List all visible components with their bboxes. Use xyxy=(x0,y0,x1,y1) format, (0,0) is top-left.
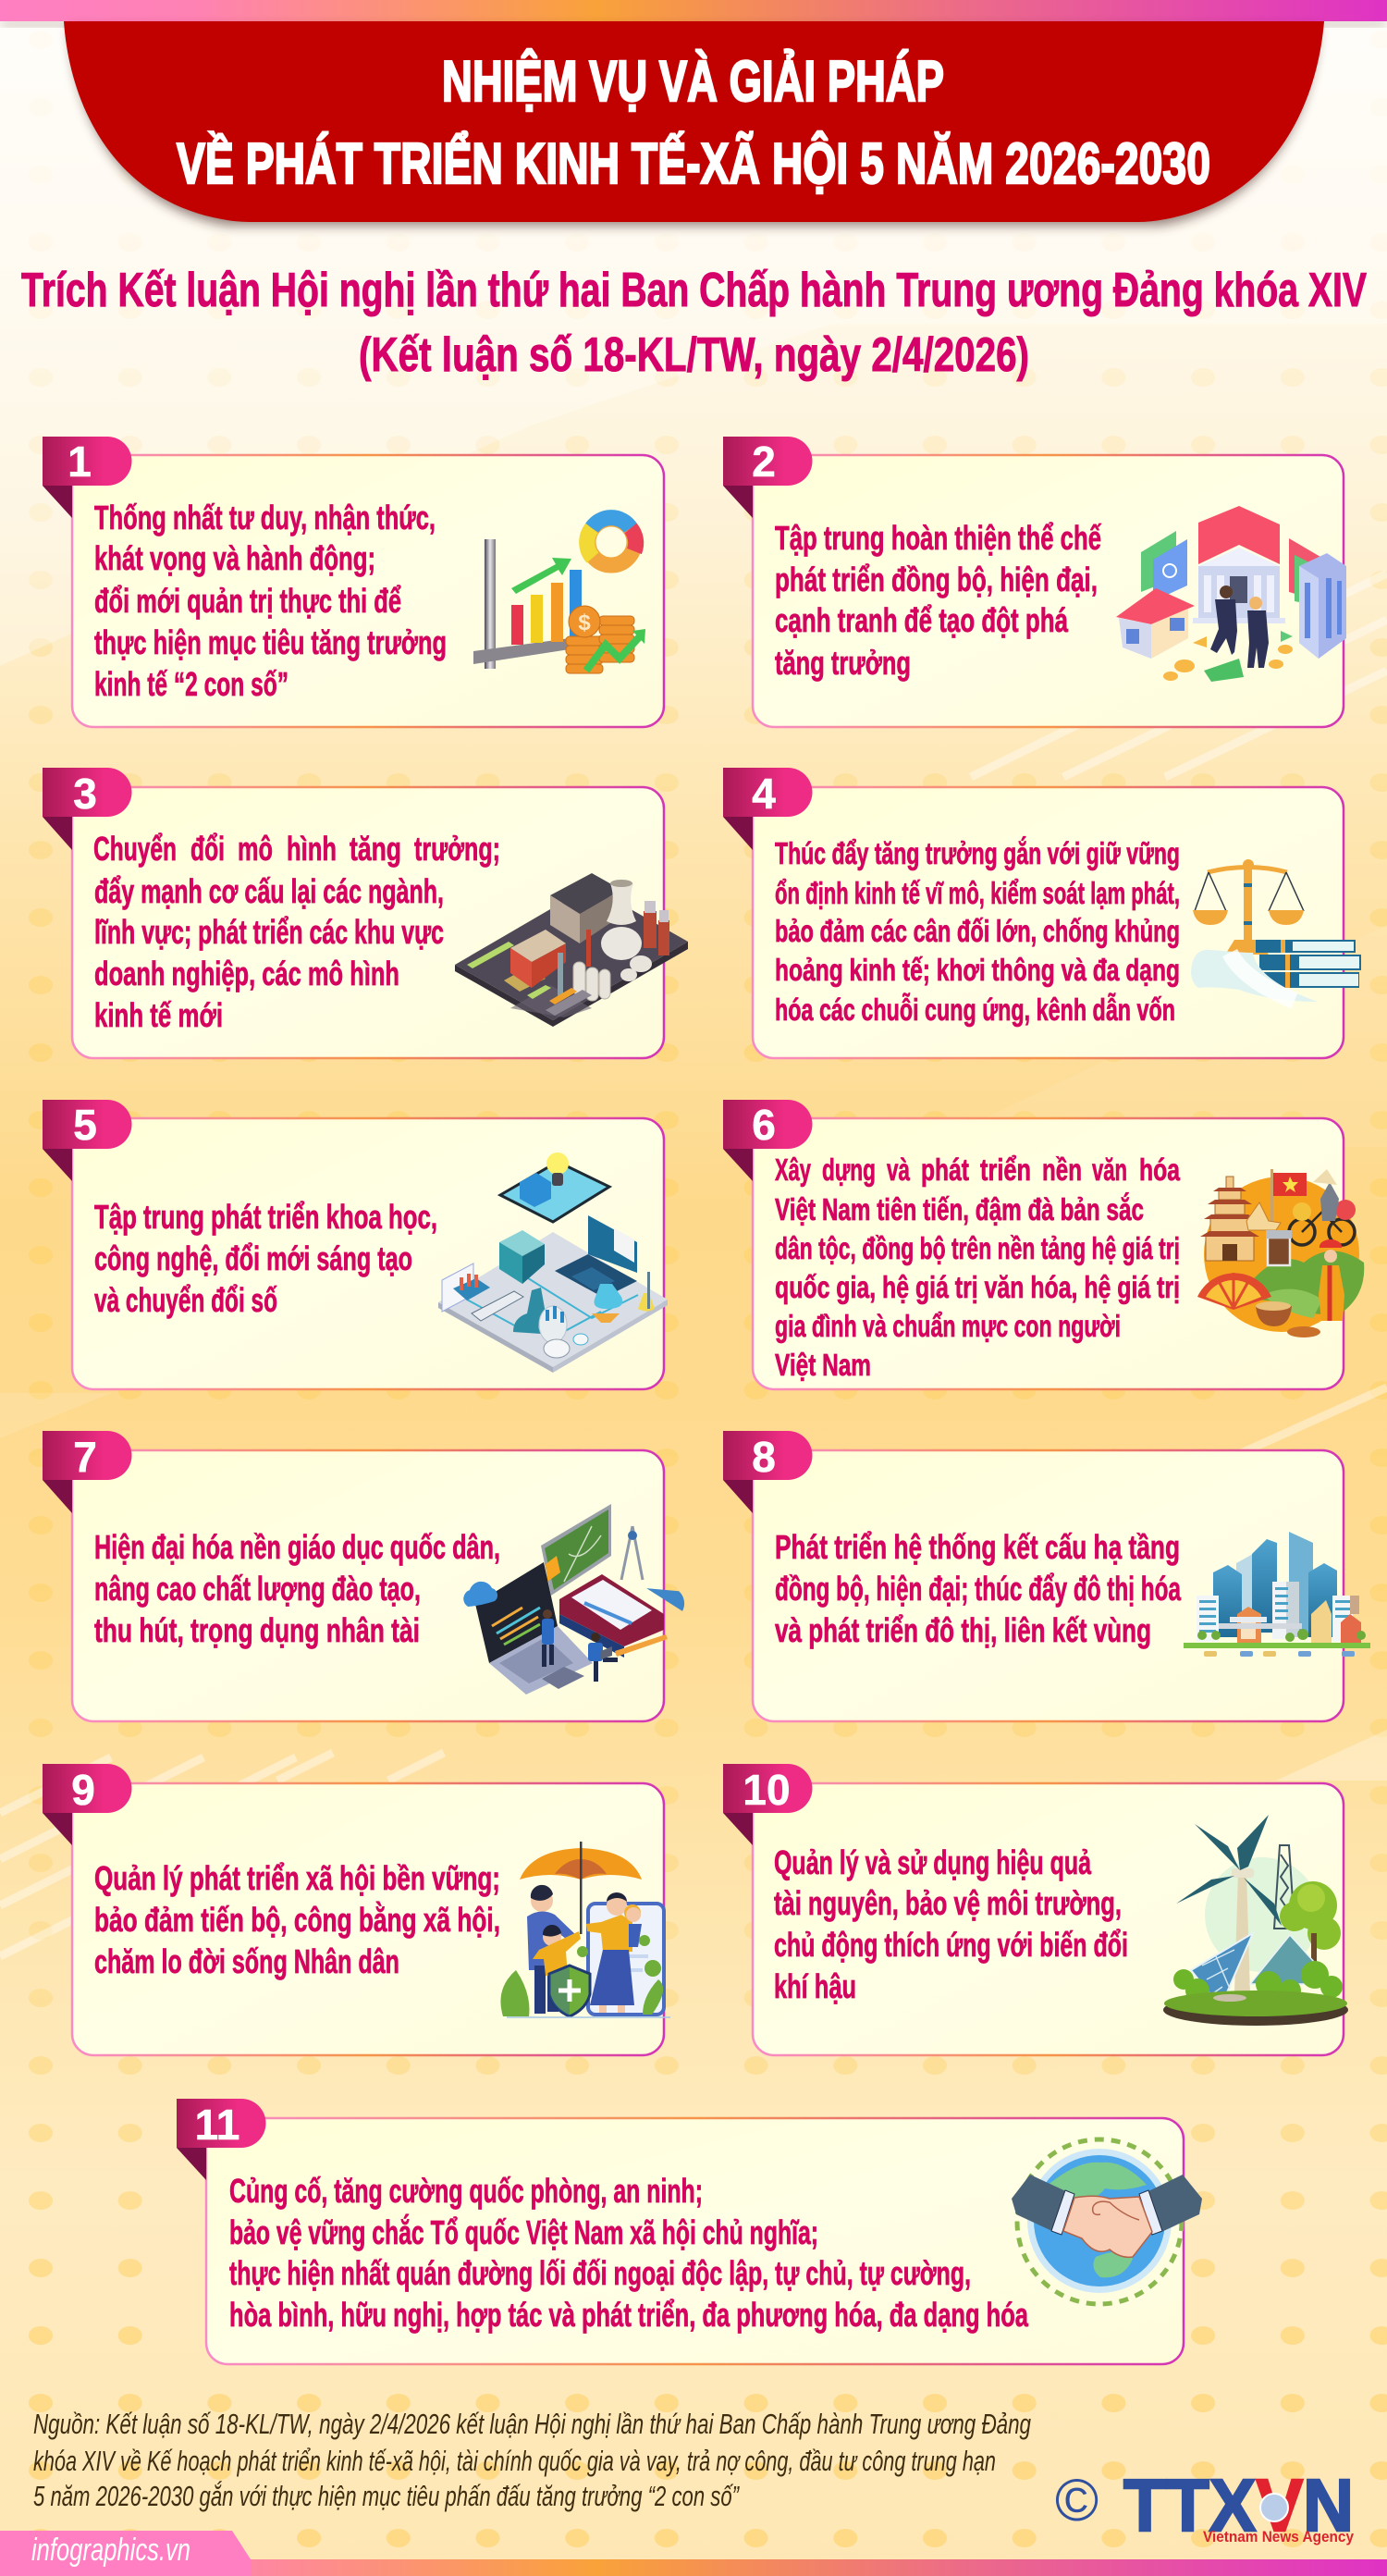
icon: laptop, blackboard and books xyxy=(463,1504,689,1695)
badge 4: 4 xyxy=(752,770,776,818)
top gradient bar xyxy=(0,0,1387,27)
text: item 9: Quản lý phát triển xã hội bền vững; xyxy=(94,1859,500,1897)
badge 9: 9 xyxy=(71,1766,95,1814)
text: item 10 xyxy=(774,1843,1128,2005)
text: item 4: hóa các chuỗi cung ứng, kênh dẫn vốn xyxy=(775,992,1175,1027)
text: item 10: tài nguyên, bảo vệ môi trường, xyxy=(774,1884,1122,1922)
text: item 5: công nghệ, đổi mới sáng tạo xyxy=(94,1239,412,1277)
source note: 5 năm 2026-2030 gắn với thực hiện mục tiêu phấn đấu tăng trưởng “2 con số” xyxy=(33,2480,740,2512)
badge 8: 8 xyxy=(752,1433,776,1481)
text: item 3: hình xyxy=(287,830,337,868)
text: item 3: kinh tế mới xyxy=(94,996,223,1034)
text: item 11: thực hiện nhất quán đường lối đối ngoại độc lập, tự chủ, tự cường, xyxy=(229,2254,971,2292)
badge 4 xyxy=(723,768,812,850)
panel: item 6 xyxy=(723,1100,1364,1389)
text: item 3: trưởng; xyxy=(414,830,500,868)
text: item 7 xyxy=(94,1528,500,1649)
panel: item 10 xyxy=(723,1764,1348,2055)
panel: item 2 xyxy=(723,437,1346,727)
text: item 3: đẩy mạnh cơ cấu lại các ngành, xyxy=(94,872,444,910)
title banner xyxy=(64,21,1324,226)
subtitle xyxy=(21,264,1367,382)
panel: item 4 xyxy=(723,768,1361,1058)
text: item 6 xyxy=(775,1152,1180,1382)
icon: modern city skyline xyxy=(1184,1532,1370,1657)
text: item 2: phát triển đồng bộ, hiện đại, xyxy=(775,561,1098,598)
text: item 3: Chuyển xyxy=(93,830,177,868)
icon: isometric factory xyxy=(455,873,688,1027)
logo: TTXVN: © xyxy=(1055,2467,1099,2533)
text: item 1 xyxy=(94,499,447,703)
footer tab: infographics.vn xyxy=(0,2531,251,2576)
text: item 11: bảo vệ vững chắc Tổ quốc Việt Nam xã hội chủ nghĩa; xyxy=(229,2212,818,2251)
text: item 11: Củng cố, tăng cường quốc phòng, an ninh; xyxy=(229,2172,703,2210)
logo: TTXVN: TTXVN xyxy=(1123,2464,1354,2546)
text: item 4: Thúc đẩy tăng trưởng gắn với giữ vững xyxy=(775,836,1180,870)
badge 3: 3 xyxy=(73,770,97,818)
text: item 9: bảo đảm tiến bộ, công bằng xã hội, xyxy=(94,1900,500,1939)
icon: family under umbrella with shield xyxy=(500,1842,670,2017)
badge 6: 6 xyxy=(752,1101,776,1149)
icon: growth chart with coins: $ xyxy=(578,610,591,635)
icon: bank, house and handshake xyxy=(1116,506,1346,682)
badge 11 xyxy=(177,2099,266,2180)
text: item 3: đổi xyxy=(190,830,225,868)
badge 1 xyxy=(43,437,131,518)
text: item 9: chăm lo đời sống Nhân dân xyxy=(94,1942,399,1980)
panel: item 8 xyxy=(723,1431,1370,1721)
text: item 6: triển xyxy=(980,1152,1031,1187)
text: item 3 xyxy=(93,830,500,1034)
text: item 2: tăng trưởng xyxy=(775,644,911,682)
text: item 5 xyxy=(94,1198,437,1319)
text: item 11: hòa bình, hữu nghị, hợp tác và phát triển, đa phương hóa, đa dạng hóa xyxy=(229,2296,1029,2334)
text: item 6: dựng xyxy=(822,1152,876,1187)
icon: handshake over globe xyxy=(1012,2139,1202,2304)
text: item 1: kinh tế “2 con số” xyxy=(94,665,288,703)
text: item 6: gia đình và chuẩn mực con người xyxy=(775,1309,1121,1343)
footer tab: infographics.vn: infographics.vn xyxy=(31,2533,190,2568)
text: item 10: Quản lý và sử dụng hiệu quả xyxy=(774,1843,1092,1881)
text: item 1: thực hiện mục tiêu tăng trưởng xyxy=(94,623,447,661)
text: item 10: chủ động thích ứng với biến đổi xyxy=(774,1926,1128,1964)
text: item 4: ổn định kinh tế vĩ mô, kiểm soát lạm phát, xyxy=(775,876,1180,910)
source note: khóa XIV về Kế hoạch phát triển kinh tế-xã hội, tài chính quốc gia và vay, trả nợ công, đầu tư công trung hạn xyxy=(33,2445,996,2477)
text: item 6: Việt Nam tiên tiến, đậm đà bản sắc xyxy=(775,1192,1144,1226)
text: item 1: Thống nhất tư duy, nhận thức, xyxy=(94,499,436,536)
badge 8 xyxy=(723,1431,812,1513)
text: item 6: phát xyxy=(921,1152,969,1187)
badge 10 xyxy=(723,1764,812,1845)
badge 2 xyxy=(723,437,812,518)
source note xyxy=(33,2408,1031,2512)
panel: item 7 xyxy=(43,1431,689,1721)
text: item 2: cạnh tranh để tạo đột phá xyxy=(775,601,1069,639)
text: item 1: đổi mới quản trị thực thi để xyxy=(94,582,401,620)
text: item 6: hóa xyxy=(1139,1152,1180,1187)
badge 11: 11 xyxy=(195,2101,239,2149)
text: item 3: lĩnh vực; phát triển các khu vực xyxy=(94,913,444,951)
text: item 7: nâng cao chất lượng đào tạo, xyxy=(94,1570,421,1608)
badge 10: 10 xyxy=(743,1766,791,1814)
text: item 3: tăng xyxy=(350,830,401,868)
text: item 6: dân tộc, đồng bộ trên nền tảng hệ giá trị xyxy=(775,1231,1180,1265)
text: item 9 xyxy=(94,1859,500,1980)
panel: item 3 xyxy=(43,768,688,1058)
badge 5: 5 xyxy=(73,1101,97,1149)
text: item 6: Việt Nam xyxy=(775,1348,871,1382)
text: item 6: văn xyxy=(1092,1152,1127,1187)
text: item 8: và phát triển đô thị, liên kết vùng xyxy=(775,1611,1151,1649)
text: item 6: nền xyxy=(1042,1152,1082,1187)
badge 2: 2 xyxy=(752,438,776,486)
text: item 4: hoảng kinh tế; khơi thông và đa dạng xyxy=(775,953,1180,987)
title banner: NHIỆM VỤ VÀ GIẢI PHÁP xyxy=(442,50,944,114)
icon: growth chart with coins xyxy=(473,518,645,673)
text: item 11 xyxy=(229,2172,1029,2334)
text: item 3: mô xyxy=(238,830,273,868)
badge 9 xyxy=(43,1764,131,1845)
badge 5 xyxy=(43,1100,131,1181)
text: item 2: Tập trung hoàn thiện thể chế xyxy=(775,519,1102,557)
panel: item 9 xyxy=(43,1764,670,2055)
panel: item 1 xyxy=(43,437,664,727)
text: item 4 xyxy=(775,836,1180,1027)
text: item 6: Xây xyxy=(775,1152,811,1187)
badge 3 xyxy=(43,768,131,850)
icon: science and technology lab xyxy=(438,1152,668,1373)
text: item 10: khí hậu xyxy=(774,1967,856,2005)
text: item 7: thu hút, trọng dụng nhân tài xyxy=(94,1611,420,1649)
badge 7 xyxy=(43,1431,131,1513)
icon: wind turbine, solar panels and trees xyxy=(1163,1815,1348,2026)
panel: item 11 xyxy=(177,2099,1202,2364)
text: item 6: quốc gia, hệ giá trị văn hóa, hệ giá trị xyxy=(775,1270,1180,1304)
subtitle: (Kết luận số 18-KL/TW, ngày 2/4/2026) xyxy=(359,328,1029,382)
bottom gradient bar xyxy=(0,2559,1387,2576)
text: item 1: khát vọng và hành động; xyxy=(94,539,375,577)
source note: Nguồn: Kết luận số 18-KL/TW, ngày 2/4/2026 kết luận Hội nghị lần thứ hai Ban Chấp hành Trung ương Đảng xyxy=(33,2408,1031,2440)
panel: item 5 xyxy=(43,1100,668,1389)
text: item 8: đồng bộ, hiện đại; thúc đẩy đô thị hóa xyxy=(775,1570,1182,1608)
text: item 6: và xyxy=(887,1152,910,1187)
icon: scales, books and scroll xyxy=(1191,859,1361,1002)
text: item 8: Phát triển hệ thống kết cấu hạ tầng xyxy=(775,1528,1180,1566)
text: item 5: và chuyển đổi số xyxy=(94,1281,277,1319)
text: item 4: bảo đảm các cân đối lớn, chống khủng xyxy=(775,914,1180,948)
badge 7: 7 xyxy=(73,1433,97,1481)
text: item 3: doanh nghiệp, các mô hình xyxy=(94,955,399,992)
text: item 8 xyxy=(775,1528,1182,1649)
text: item 2 xyxy=(775,519,1102,682)
text: item 7: Hiện đại hóa nền giáo dục quốc dân, xyxy=(94,1528,500,1566)
text: item 5: Tập trung phát triển khoa học, xyxy=(94,1198,437,1236)
badge 6 xyxy=(723,1100,812,1181)
icon: Vietnamese culture collage xyxy=(1197,1169,1364,1337)
badge 1: 1 xyxy=(68,438,92,486)
logo: TTXVN: Vietnam News Agency xyxy=(1203,2528,1354,2545)
